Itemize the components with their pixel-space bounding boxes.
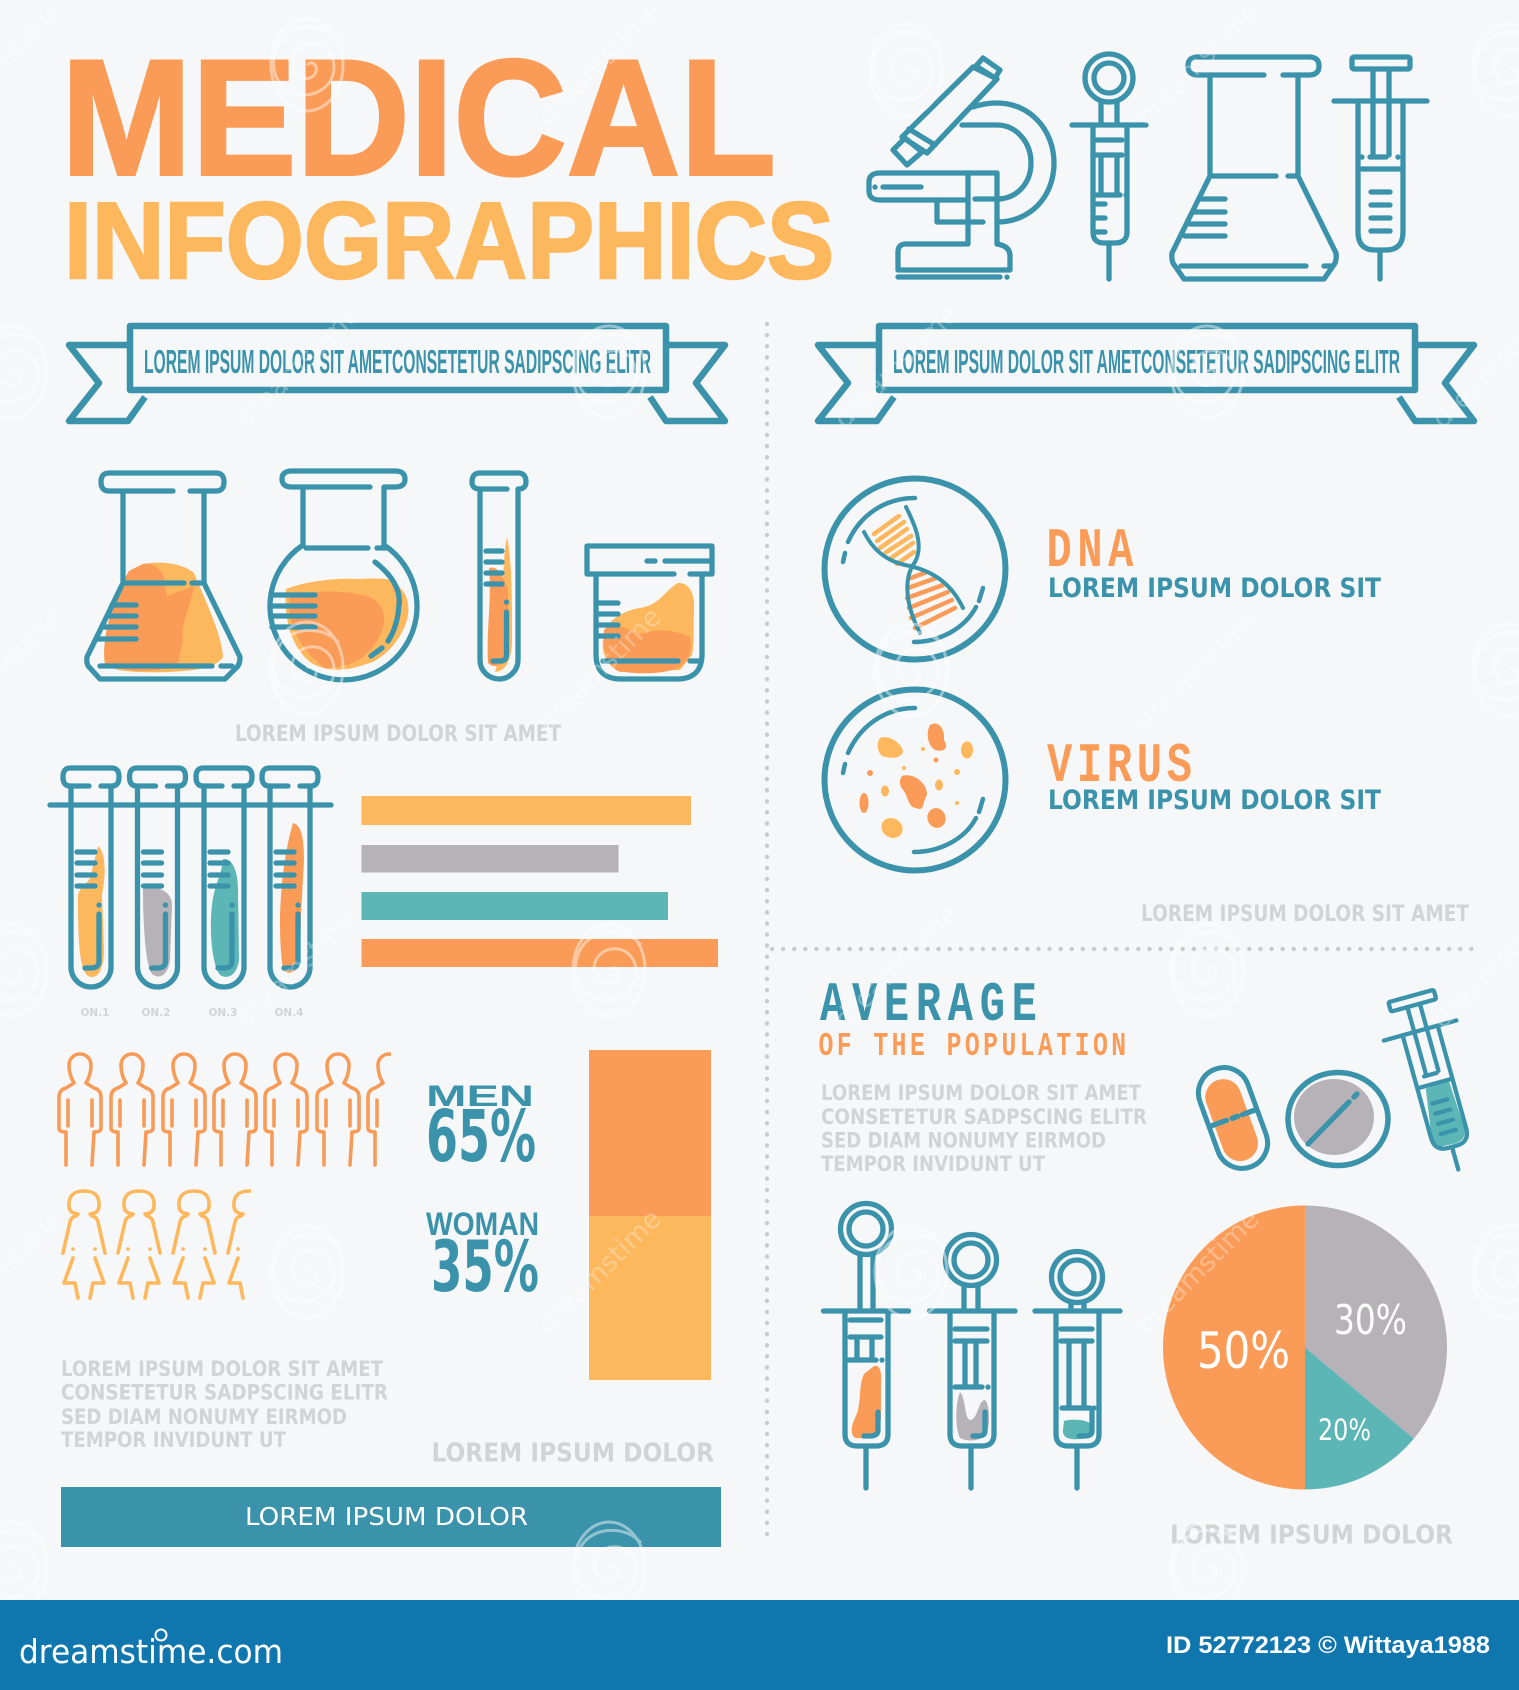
heading: average of the population: AVERAGE [820, 974, 1044, 1037]
text: dreamstime [828, 298, 965, 435]
virus label [1047, 735, 1381, 816]
icon: specimen jar with liquid [587, 546, 712, 679]
icon: conical flask with liquid [87, 473, 240, 679]
men and women statistics: 35% [431, 1226, 539, 1308]
icon: syringe with orange fill [824, 1204, 908, 1488]
women pictogram row [63, 1191, 270, 1298]
pie chart: 20% [1318, 1413, 1371, 1447]
footer: source strip: dreamstime.com [19, 1632, 283, 1671]
heading: average of the population [818, 974, 1130, 1065]
icon: syringe with grey fill [930, 1234, 1015, 1488]
text block: right paragraph: CONSETETUR SADPSCING ELITR [821, 1105, 1147, 1129]
rack of test tubes [50, 768, 331, 987]
text: dreamstime [230, 898, 367, 1035]
text block: left paragraph: SED DIAM NONUMY EIRMOD [61, 1405, 347, 1429]
text block: right paragraph: TEMPOR INVIDUNT UT [821, 1152, 1046, 1176]
icon: tilted syringe [1374, 986, 1495, 1179]
title: MEDICAL [61, 26, 776, 210]
text: dreamstime [531, 1203, 668, 1340]
icon: test tube with liquid [472, 473, 526, 679]
tube labels [80, 1007, 304, 1019]
title: INFOGRAPHICS [64, 180, 834, 302]
text block: left paragraph: TEMPOR INVIDUNT UT [61, 1428, 287, 1452]
tube labels: ON.1 [80, 1007, 110, 1019]
text: dreamstime [1129, 1203, 1266, 1340]
icon: round flask with liquid [270, 471, 417, 680]
men and women statistics: 65% [426, 1095, 536, 1178]
DNA label: DNA [1046, 520, 1139, 583]
icon: round-top syringe [1072, 54, 1146, 279]
tube labels: ON.3 [208, 1007, 238, 1019]
text block: left paragraph [61, 1357, 388, 1452]
pie chart: 30% [1334, 1296, 1407, 1344]
banner: left ribbon [69, 326, 725, 421]
pie chart [1163, 1206, 1447, 1490]
icon: round pill [1288, 1072, 1388, 1166]
men pictogram row [59, 1054, 410, 1165]
caption: left chart: LOREM IPSUM DOLOR [432, 1438, 714, 1468]
pie chart: 50% [1197, 1322, 1290, 1380]
text: dreamstime [230, 298, 367, 435]
DNA label: LOREM IPSUM DOLOR SIT [1048, 573, 1381, 604]
heading: average of the population: OF THE POPULATION [818, 1028, 1130, 1065]
text block: right paragraph: SED DIAM NONUMY EIRMOD [821, 1128, 1106, 1152]
virus label: LOREM IPSUM DOLOR SIT [1048, 785, 1381, 816]
text block: right paragraph: LOREM IPSUM DOLOR SIT AMET [821, 1081, 1142, 1105]
icon: capsule [1191, 1060, 1275, 1176]
icon: DNA circle [824, 478, 1006, 660]
bar chart [362, 796, 718, 967]
footer: source strip [0, 1600, 1519, 1690]
icon: plunger syringe [1334, 57, 1427, 279]
stacked column chart [589, 1050, 711, 1380]
footer bar: left panel [61, 1487, 721, 1547]
caption: glassware: LOREM IPSUM DOLOR SIT AMET [235, 722, 561, 747]
icon: syringe with teal fill [1035, 1252, 1120, 1488]
text: dreamstime [828, 898, 965, 1035]
text block: left paragraph: LOREM IPSUM DOLOR SIT AMET [61, 1357, 384, 1381]
men and women statistics: MEN [426, 1080, 534, 1113]
icon: microscope [869, 58, 1054, 277]
text block: right paragraph [821, 1081, 1147, 1176]
men and women statistics [426, 1080, 539, 1308]
DNA label [1046, 520, 1381, 604]
text: dreamstime [531, 601, 668, 738]
virus label: VIRUS [1047, 735, 1197, 798]
banner: right ribbon [818, 326, 1474, 421]
men and women statistics: WOMAN [426, 1206, 539, 1242]
footer bar: left panel: LOREM IPSUM DOLOR [245, 1502, 528, 1531]
title [61, 26, 834, 302]
icon: conical flask [1172, 57, 1336, 279]
caption: pie chart: LOREM IPSUM DOLOR [1170, 1520, 1453, 1550]
text: dreamstime [1129, 601, 1266, 738]
text block: left paragraph: CONSETETUR SADPSCING ELITR [61, 1380, 388, 1404]
tube labels: ON.2 [141, 1007, 171, 1019]
tube labels: ON.4 [274, 1007, 304, 1019]
footer: source strip: ID 52772123 © Wittaya1988 [1166, 1632, 1490, 1659]
banner: left ribbon: LOREM IPSUM DOLOR SIT AMETCONSETETUR SADIPSCING ELITR [144, 343, 651, 380]
icon: virus circle [824, 690, 1006, 870]
